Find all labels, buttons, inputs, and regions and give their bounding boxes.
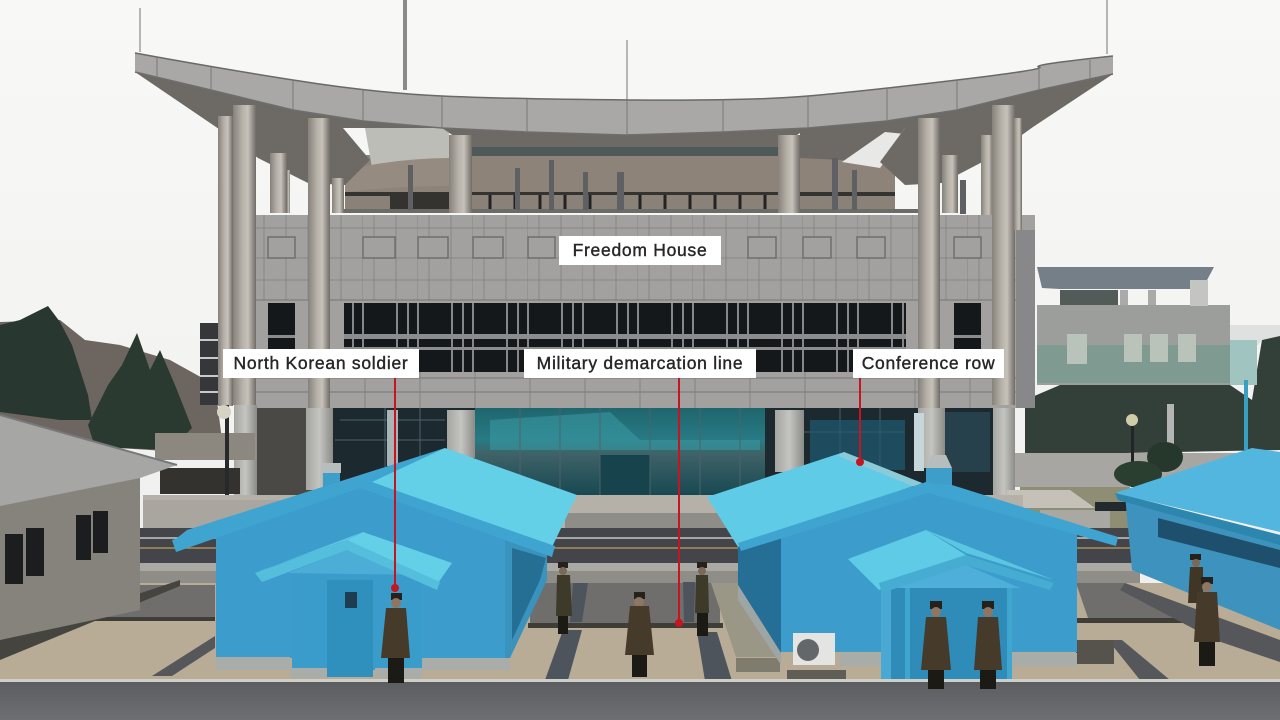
label: Military demarcation line: Military demarcation line [537,353,743,373]
label: Conference row [853,349,1004,378]
label: Freedom House: Freedom House [573,240,707,260]
building: glazed ground floor [234,405,1015,500]
building: curved roof fascia [135,53,1113,135]
conference hut right [707,452,1118,686]
soldier: north korean soldier [381,593,410,683]
soldier: far right rear [1188,554,1203,603]
right wall and lamps [1007,380,1250,530]
building: rear right [1037,267,1257,385]
trees: left [0,306,222,452]
leader line: Military demarcation line [675,378,683,627]
building: roof underside [135,72,1113,185]
building: columns [218,105,1022,408]
windows band [344,303,906,372]
label: North Korean soldier: North Korean soldier [234,353,408,373]
label: Conference row: Conference row [862,353,995,373]
soldier: on the line [695,562,709,636]
leader line: North Korean soldier [391,378,399,592]
trees: right [1025,325,1280,455]
grey barracks left [0,415,177,640]
blue hut right edge [1115,448,1280,630]
soldier: centre [625,592,654,677]
small vents [322,410,952,490]
soldier: far right front [1194,577,1220,666]
leader line: Conference row [856,378,864,466]
asphalt foreground [0,679,1280,720]
masts [140,0,1107,100]
soldier: door right [974,601,1002,689]
building: Freedom House upper rotunda [338,128,966,214]
label: Military demarcation line [524,349,756,378]
soldier: behind left hut [556,562,572,634]
label: Freedom House [559,236,721,265]
label: North Korean soldier [223,349,419,378]
conference hut left [172,448,577,678]
air conditioner [787,633,846,680]
porch [848,530,1054,686]
soldiers [381,554,1220,689]
building: Freedom House facade [253,215,1035,408]
forecourt and road [0,495,1280,681]
soldier: door left [921,601,951,689]
stairs tower and balustrade [155,323,255,523]
porch [255,532,452,678]
